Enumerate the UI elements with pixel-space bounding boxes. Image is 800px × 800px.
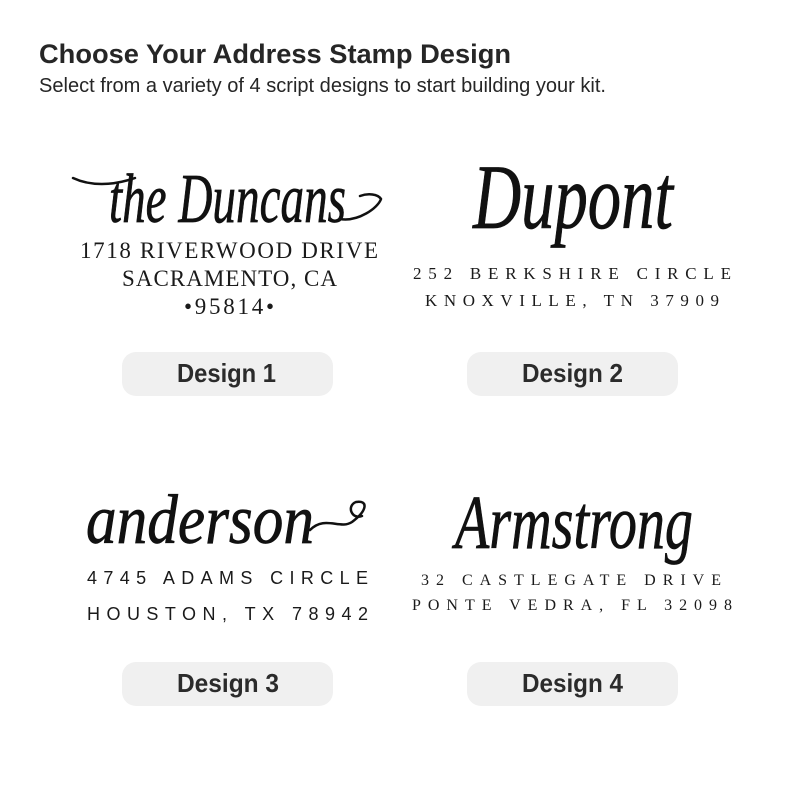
design 3 button (122, 662, 333, 706)
design 1 address: 1718 RIVERWOOD DRIVE (80, 238, 378, 263)
design 1 address (80, 238, 378, 319)
panel: design 4 (412, 481, 732, 706)
design 3 address: HOUSTON, TX 78942 (87, 604, 368, 624)
design 1 address: •95814• (184, 294, 274, 319)
design 1 button (122, 352, 333, 396)
panel: design 2 (413, 146, 731, 396)
design 3 address (87, 568, 368, 624)
design 1 flourish (73, 178, 381, 219)
design 4 button (467, 662, 678, 706)
design 2 script name: Dupont (472, 146, 675, 248)
design 2 button: Design 2 (522, 358, 623, 388)
design 1 script name: the Duncans (109, 161, 346, 238)
design 3 address: 4745 ADAMS CIRCLE (87, 568, 368, 588)
design 4 script name: Armstrong (451, 481, 693, 565)
design 2 address (413, 264, 731, 310)
design 4 button: Design 4 (522, 668, 623, 698)
design 1 address: SACRAMENTO, CA (122, 266, 337, 291)
design 4 address: PONTE VEDRA, FL 32098 (412, 597, 732, 614)
design 3 script name: anderson (86, 482, 314, 559)
panel: design 3 (86, 482, 368, 706)
design 4 address: 32 CASTLEGATE DRIVE (421, 572, 721, 589)
design 3 flourish (310, 502, 365, 530)
design 2 address: KNOXVILLE, TN 37909 (425, 291, 719, 310)
design 2 address: 252 BERKSHIRE CIRCLE (413, 264, 731, 283)
design 4 address (412, 572, 732, 614)
title: Choose Your Address Stamp Design (39, 39, 511, 69)
design 1 button: Design 1 (177, 358, 276, 388)
subtitle: Select from a variety of 4 script designs to start building your kit. (39, 75, 606, 97)
panel: design 1 (73, 161, 381, 396)
design 2 button (467, 352, 678, 396)
design 3 button: Design 3 (177, 668, 279, 698)
